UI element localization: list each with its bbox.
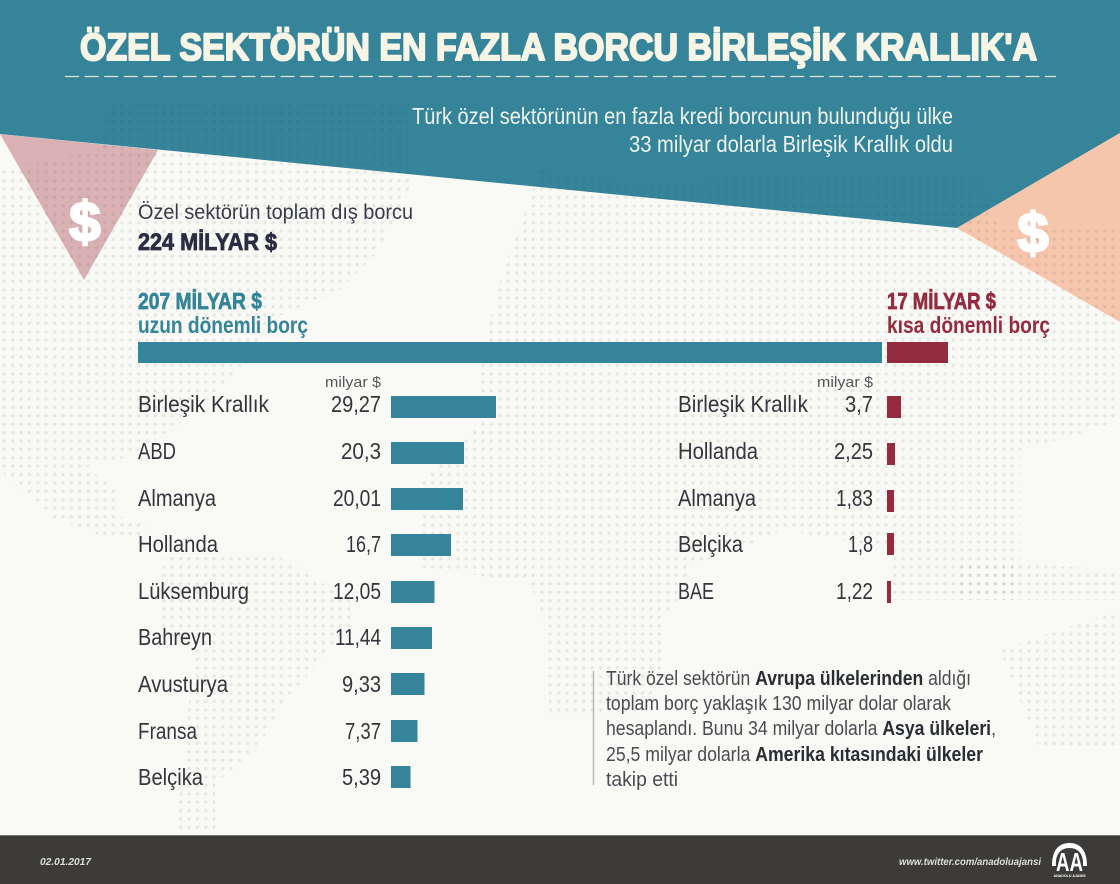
chart: short term debt by country	[678, 374, 901, 604]
long term heading: 207 MİLYAR $	[138, 288, 262, 314]
header band	[0, 0, 1120, 228]
subtitle: Türk özel sektörünün en fazla kredi borcunun bulunduğu ülke	[412, 103, 953, 129]
chart: long term debt by country: Hollanda	[138, 531, 218, 557]
chart: long term debt by country: Avusturya	[138, 671, 228, 697]
chart: short term debt by country: 1,83	[836, 485, 873, 511]
chart: long term debt by country: 16,7	[346, 531, 381, 557]
chart: short term debt by country: BAE	[678, 578, 714, 604]
chart: long term debt by country: 5,39	[342, 764, 381, 790]
date: 02.01.2017	[40, 856, 92, 868]
text block: regional note: takip etti	[606, 769, 678, 791]
short term heading: kısa dönemli borç	[887, 312, 1050, 338]
icon: Anadolu Agency logo	[1052, 843, 1087, 878]
note divider	[592, 671, 594, 785]
total debt label	[138, 201, 413, 256]
long term heading: uzun dönemli borç	[138, 312, 308, 338]
twitter address: www.twitter.com/anadoluajansi	[899, 856, 1042, 868]
short term heading	[887, 288, 1050, 338]
triangle: pink	[0, 134, 158, 280]
chart: long term debt by country: Belçika	[138, 764, 203, 790]
text block: regional note: toplam borç yaklaşık 130 milyar dolar olarak	[606, 693, 952, 715]
chart: long term debt by country: Lüksemburg	[138, 578, 249, 604]
total bar	[138, 342, 948, 363]
chart: long term debt by country: 11,44	[335, 624, 381, 650]
text block: regional note: hesaplandı. Bunu 34 milyar dolarla Asya ülkeleri,	[606, 718, 996, 740]
icon: Anadolu Agency logo: ANADOLU AJANSI	[1054, 873, 1086, 878]
total debt label: 224 MİLYAR $	[138, 229, 278, 256]
short term heading: 17 MİLYAR $	[887, 288, 996, 314]
chart: long term debt by country: ABD	[138, 438, 176, 464]
chart: short term debt by country: Birleşik Krallık	[678, 391, 808, 417]
chart: short term debt by country: milyar $	[817, 374, 874, 391]
total debt label: Özel sektörün toplam dış borcu	[138, 201, 413, 224]
text block: regional note: 25,5 milyar dolarla Amerika kıtasındaki ülkeler	[606, 744, 983, 766]
subtitle	[412, 103, 953, 157]
chart: long term debt by country: 7,37	[345, 718, 381, 744]
chart: short term debt by country: 3,7	[845, 391, 873, 417]
chart: long term debt by country: milyar $	[325, 374, 382, 391]
chart: long term debt by country: 29,27	[331, 391, 381, 417]
chart: short term debt by country: Hollanda	[678, 438, 758, 464]
chart: short term debt by country: Almanya	[678, 485, 756, 511]
chart: long term debt by country: Bahreyn	[138, 624, 212, 650]
chart: short term debt by country: 2,25	[834, 438, 873, 464]
chart: long term debt by country: Birleşik Krallık	[138, 391, 269, 417]
triangle: peach	[957, 133, 1120, 322]
icon: Anadolu Agency logo: AA	[1056, 847, 1083, 877]
text block: regional note	[606, 668, 996, 791]
footer bar	[0, 835, 1120, 884]
chart: long term debt by country: 12,05	[333, 578, 381, 604]
subtitle: 33 milyar dolarla Birleşik Krallık oldu	[629, 131, 953, 157]
icon: dollar on peach triangle: $	[1017, 201, 1049, 264]
chart: short term debt by country: 1,8	[848, 531, 873, 557]
chart: short term debt by country: 1,22	[836, 578, 873, 604]
chart: long term debt by country: 20,3	[341, 438, 381, 464]
long term heading	[138, 288, 308, 338]
icon: dollar on pink triangle: $	[69, 190, 101, 253]
chart: long term debt by country: 20,01	[333, 485, 381, 511]
chart: long term debt by country: Fransa	[138, 718, 197, 744]
chart: short term debt by country: Belçika	[678, 531, 743, 557]
text block: regional note: Türk özel sektörün Avrupa ülkelerinden aldığı	[606, 668, 971, 690]
chart: long term debt by country: Almanya	[138, 485, 216, 511]
chart: long term debt by country	[138, 374, 496, 790]
chart: long term debt by country: 9,33	[342, 671, 381, 697]
title: ÖZEL SEKTÖRÜN EN FAZLA BORCU BİRLEŞİK KRALLIK'A	[80, 26, 1037, 69]
title divider	[65, 76, 1056, 78]
